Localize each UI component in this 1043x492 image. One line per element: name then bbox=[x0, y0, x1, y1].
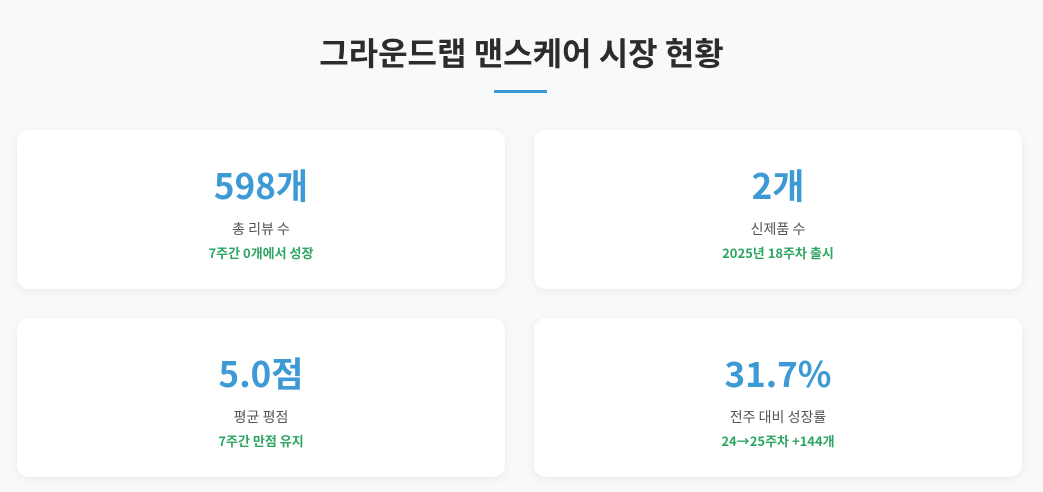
label: 평균 평점 bbox=[234, 407, 288, 427]
number: 5.0점 bbox=[219, 347, 303, 398]
sub note: 2025년 18주차 출시 bbox=[722, 243, 834, 262]
panel: total reviews bbox=[17, 130, 505, 289]
title: 그라운드랩 맨스케어 시장 현황 bbox=[319, 29, 724, 75]
number: 2개 bbox=[752, 159, 804, 210]
label: 총 리뷰 수 bbox=[232, 219, 290, 239]
panel: average rating bbox=[17, 318, 505, 477]
number: 31.7% bbox=[724, 347, 832, 398]
sub note: 7주간 만점 유지 bbox=[218, 431, 304, 450]
number: 598개 bbox=[214, 159, 308, 210]
panel: growth rate bbox=[534, 318, 1022, 477]
title underline bbox=[494, 90, 547, 93]
label: 전주 대비 성장률 bbox=[730, 407, 826, 427]
panel: new products bbox=[534, 130, 1022, 289]
label: 신제품 수 bbox=[751, 219, 805, 239]
sub note: 24→25주차 +144개 bbox=[721, 431, 835, 450]
sub note: 7주간 0개에서 성장 bbox=[209, 243, 313, 262]
